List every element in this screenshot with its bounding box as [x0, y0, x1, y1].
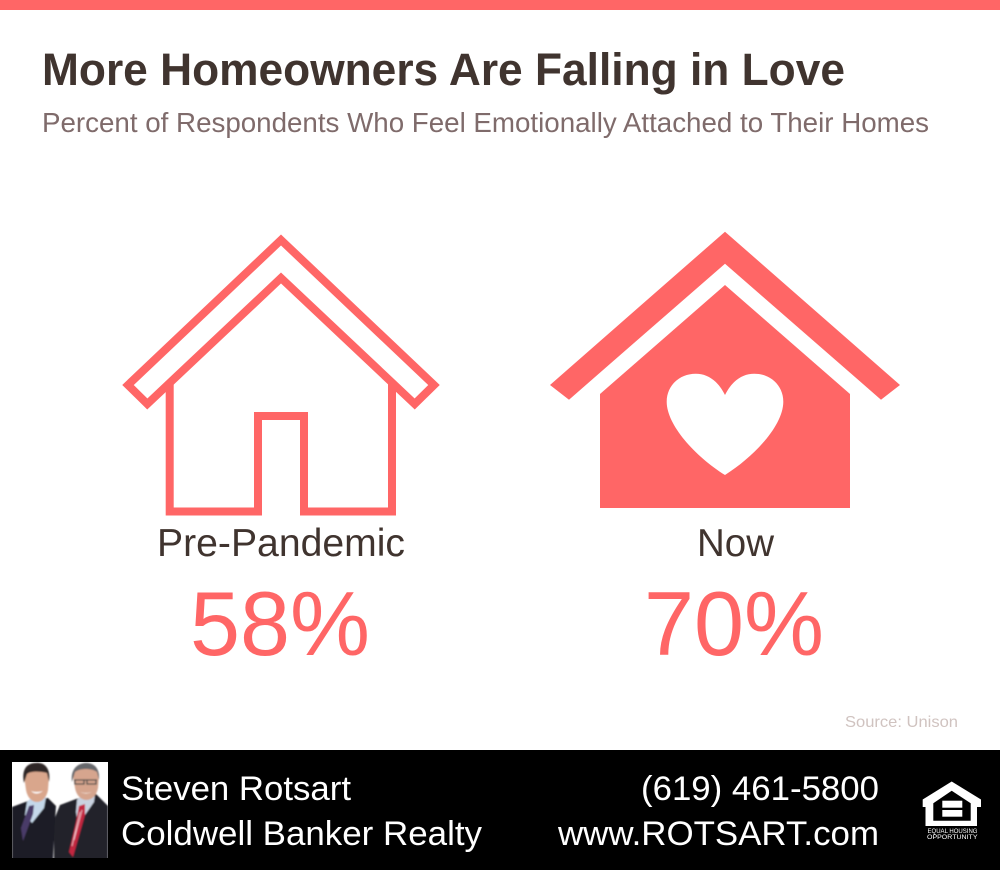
phone number: (619) 461-5800 — [641, 770, 879, 808]
icon: equal housing opportunity: OPPORTUNITY — [927, 834, 978, 841]
icon: filled house with heart (now) — [550, 232, 900, 508]
agent name: Steven Rotsart — [121, 770, 352, 808]
source note: Source: Unison — [845, 714, 958, 731]
icon: outlined house (pre-pandemic) — [128, 240, 434, 512]
value: 70%: 70% — [644, 574, 824, 675]
brokerage name: Coldwell Banker Realty — [121, 815, 482, 853]
website: www.ROTSART.com — [557, 815, 879, 853]
label: pre-pandemic: Pre-Pandemic — [157, 522, 405, 565]
title: More Homeowners Are Falling in Love — [42, 44, 845, 95]
footer band — [0, 750, 1000, 870]
icon: equal housing opportunity — [923, 782, 981, 841]
value: 58%: 58% — [190, 574, 370, 675]
subtitle: Percent of Respondents Who Feel Emotionally Attached to Their Homes — [42, 107, 929, 138]
right man — [54, 794, 108, 860]
label: now: Now — [697, 522, 774, 565]
agent photo — [12, 762, 108, 860]
top accent bar — [0, 0, 1000, 10]
left man — [12, 798, 56, 860]
icon: equal housing opportunity: EQUAL HOUSING — [928, 828, 978, 835]
